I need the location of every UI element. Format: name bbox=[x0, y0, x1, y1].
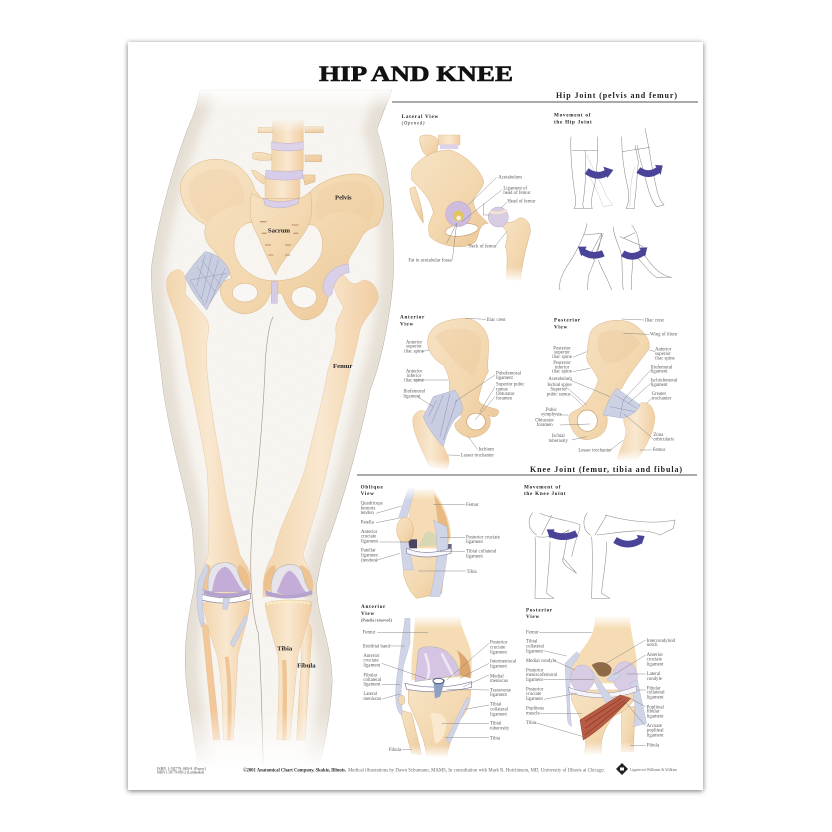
title: HIP AND KNEE bbox=[319, 61, 513, 86]
pelvic inlet bbox=[234, 223, 323, 281]
left fibula bbox=[202, 620, 220, 740]
labels: anterior knee: Tibial bbox=[490, 722, 501, 727]
labels: posterior view: Iliac crest bbox=[645, 318, 665, 323]
left femur bbox=[166, 270, 251, 593]
sacral foramina bbox=[260, 222, 298, 255]
main figure labels: Sacrum bbox=[268, 228, 291, 235]
labels: lateral view bbox=[408, 176, 536, 263]
labels: oblique view: (tendon) bbox=[361, 559, 378, 564]
illustration: pelvis lateral bbox=[410, 135, 488, 247]
labels: posterior view: inferior bbox=[555, 365, 570, 370]
ilium shading bbox=[188, 169, 374, 223]
labels: posterior view: Ischial spine bbox=[547, 383, 572, 388]
sacrum bbox=[250, 192, 312, 275]
labels: anterior view: iliac spine bbox=[404, 349, 424, 354]
labels: anterior knee: ligament bbox=[490, 665, 508, 670]
labels: posterior view: iliac spine bbox=[552, 355, 572, 360]
labels: anterior view: Iliac crest bbox=[487, 318, 506, 323]
illustration: anterior knee bbox=[396, 615, 472, 758]
labels: anterior knee: meniscus bbox=[363, 697, 381, 702]
labels: lateral view: Neck of femur bbox=[468, 244, 497, 249]
labels: posterior knee: collateral bbox=[647, 691, 665, 696]
heading: posterior view: View bbox=[554, 324, 568, 330]
right knee bbox=[264, 564, 313, 740]
labels: posterior knee: Femur bbox=[526, 631, 539, 636]
labels: anterior knee: Femur bbox=[363, 630, 376, 635]
leg sketch: hip abduction bbox=[571, 137, 613, 208]
labels: posterior knee: Popliteus bbox=[526, 706, 544, 711]
labels: posterior knee: ligament bbox=[647, 696, 664, 701]
labels: posterior knee: ligament bbox=[526, 678, 544, 683]
left tibia bbox=[203, 599, 250, 740]
labels: posterior view: Iliofemoral bbox=[651, 365, 672, 370]
labels: oblique view: ligament bbox=[466, 540, 484, 545]
labels: anterior view: Iliofemoral bbox=[403, 390, 425, 395]
labels: posterior knee: Tibia bbox=[526, 721, 537, 726]
heading: movement of the knee joint: Movement of bbox=[524, 484, 561, 490]
labels: oblique view: tendon bbox=[361, 511, 374, 516]
labels: posterior knee: ligament bbox=[647, 715, 664, 720]
labels: oblique view: Patella bbox=[361, 521, 375, 526]
panel: hip lateral view and movement bbox=[402, 112, 672, 290]
labels: anterior knee: Iliotibial band bbox=[363, 645, 390, 650]
labels: posterior view: symphysis bbox=[541, 413, 562, 418]
labels: anterior view: iliac spine bbox=[404, 379, 424, 384]
heading: hip joint section: Hip Joint (pelvis and femur) bbox=[556, 91, 677, 100]
labels: anterior knee: ligament bbox=[363, 663, 381, 668]
left knee ligaments bbox=[197, 563, 247, 647]
labels: posterior knee: Arcuate bbox=[647, 724, 662, 729]
heading: anterior knee view: View bbox=[361, 611, 375, 617]
soft shading at skin edges bbox=[152, 92, 394, 759]
labels: posterior view bbox=[535, 318, 678, 454]
labels: anterior view: Ischium bbox=[478, 448, 494, 453]
heading: posterior knee view: View bbox=[526, 614, 540, 620]
labels: posterior knee: fibular bbox=[647, 710, 660, 715]
labels: posterior view: superior bbox=[554, 351, 570, 356]
labels: posterior view: iliac spine bbox=[552, 370, 572, 375]
heading: anterior view: View bbox=[400, 321, 414, 327]
labels: posterior knee: ligament bbox=[526, 649, 544, 654]
labels: posterior knee: Anterior bbox=[647, 653, 663, 658]
labels: oblique view: cruciate bbox=[361, 535, 376, 540]
labels: posterior view: iliac spine bbox=[655, 356, 675, 361]
labels: posterior knee: ligament bbox=[647, 662, 664, 667]
main figure labels: Tibia bbox=[277, 645, 293, 652]
labels: anterior view: ligament bbox=[403, 394, 421, 399]
left meniscus bbox=[201, 593, 251, 603]
labels: anterior knee: Tibial bbox=[490, 703, 501, 708]
labels: posterior view: tuberosity bbox=[549, 439, 569, 444]
labels: posterior view: superior bbox=[655, 352, 671, 357]
body silhouette bbox=[151, 90, 393, 767]
top fade bbox=[130, 87, 392, 110]
heading: oblique view: View bbox=[361, 491, 375, 497]
labels: anterior knee: Posterior bbox=[490, 641, 507, 646]
labels: anterior knee bbox=[363, 630, 517, 753]
labels: posterior knee: ligament bbox=[647, 733, 664, 738]
heading: movement of the hip joint: the Hip Joint bbox=[554, 119, 592, 125]
labels: posterior view: Acetabulum bbox=[548, 377, 572, 382]
labels: posterior knee: muscle bbox=[526, 711, 540, 716]
heading: lateral view: (Opened) bbox=[402, 122, 425, 127]
labels: posterior view: trochanter bbox=[652, 397, 672, 402]
heading: oblique view: Oblique bbox=[361, 484, 384, 490]
labels: oblique view: femoris bbox=[361, 506, 376, 511]
pelvis bbox=[180, 159, 384, 320]
main figure labels bbox=[268, 194, 352, 670]
left hip ligament bbox=[185, 252, 230, 310]
labels: posterior view: orbicularis bbox=[653, 438, 674, 443]
right fibula bbox=[297, 620, 312, 740]
main figure: full pelvis and legs skeleton bbox=[151, 90, 394, 764]
labels: oblique view: ligament bbox=[361, 540, 379, 545]
labels: anterior knee: cruciate bbox=[490, 645, 505, 650]
footer: copyright and credits: ©2001 Anatomical Chart Company, Skokie, Illinois. bbox=[243, 768, 346, 774]
labels: oblique view: Quadriceps bbox=[361, 502, 383, 507]
labels: anterior knee: tuberosity bbox=[490, 726, 510, 731]
labels: posterior knee: notch bbox=[647, 643, 658, 648]
illustration: oblique knee bbox=[397, 487, 453, 598]
labels: anterior knee: Tibia bbox=[490, 736, 501, 741]
illustration: anterior hip bbox=[413, 318, 499, 471]
heading: knee joint section: Knee Joint (femur, tibia and fibula) bbox=[530, 465, 682, 474]
labels: anterior view: superior bbox=[406, 345, 422, 350]
labels: posterior knee: Medial condyle bbox=[526, 659, 556, 664]
leg sketch: knee extension bbox=[584, 513, 675, 598]
labels: anterior knee: meniscus bbox=[490, 679, 508, 684]
labels: posterior view: foramen bbox=[537, 423, 553, 428]
labels: posterior knee: Intercondyloid bbox=[647, 639, 675, 644]
labels: posterior view: Obturator bbox=[535, 418, 554, 423]
labels: oblique view: Anterior bbox=[361, 530, 377, 535]
heading: lateral view: Lateral View bbox=[402, 114, 439, 120]
poster sheet bbox=[128, 42, 703, 790]
footer: ISBN block: ISBN 1-58779-080-8 (Paper) bbox=[157, 767, 207, 771]
labels: oblique view: Femur bbox=[466, 503, 479, 508]
bottom fade bbox=[150, 710, 350, 770]
labels: posterior view: Ischial bbox=[552, 434, 565, 439]
labels: anterior knee: collateral bbox=[490, 707, 509, 712]
labels: posterior knee: ligament bbox=[526, 697, 544, 702]
heading: anterior knee view: (Patella removed) bbox=[361, 618, 392, 623]
labels: posterior knee: cruciate bbox=[647, 657, 662, 662]
labels: posterior view: ligament bbox=[651, 383, 668, 388]
main figure labels: Fibula bbox=[297, 663, 316, 670]
labels: anterior knee: Medial bbox=[490, 674, 504, 679]
publisher logo: Lippincott Williams & Wilkins bbox=[630, 768, 678, 772]
labels: lateral view: Fat in acetabular fossa bbox=[408, 258, 452, 263]
labels: oblique view bbox=[361, 502, 500, 575]
labels: oblique view: ligament bbox=[361, 554, 379, 559]
heading: posterior knee view: Posterior bbox=[526, 607, 553, 613]
labels: anterior view: Lesser trochanter bbox=[461, 454, 494, 459]
heading: anterior view: Anterior bbox=[400, 314, 425, 320]
labels: posterior knee bbox=[526, 631, 676, 749]
publisher logo bbox=[616, 763, 678, 775]
labels: lateral view: Ligament of bbox=[503, 186, 527, 191]
labels: lateral view: Acetabulum bbox=[498, 176, 522, 181]
leg sketch: knee flexion bbox=[529, 513, 580, 598]
labels: posterior view: Greater bbox=[652, 392, 666, 397]
spine top fade bbox=[257, 118, 325, 132]
popliteus muscle bbox=[580, 695, 631, 740]
labels: anterior view bbox=[403, 318, 525, 459]
labels: anterior view: Anterior bbox=[406, 340, 422, 345]
labels: posterior view: Superior bbox=[550, 388, 567, 393]
labels: anterior view: Anterior bbox=[406, 370, 422, 375]
labels: anterior view: inferior bbox=[407, 374, 422, 379]
labels: posterior view: Pubic bbox=[546, 408, 557, 413]
labels: posterior view: Posterior bbox=[553, 346, 571, 351]
labels: posterior view: Anterior bbox=[655, 348, 671, 353]
illustration: posterior hip bbox=[569, 320, 655, 462]
labels: posterior view: Wing of ilium bbox=[650, 333, 677, 338]
labels: oblique view: Patellar bbox=[361, 549, 376, 554]
labels: lateral view: Head of femur bbox=[507, 199, 536, 204]
illustration: posterior knee bbox=[565, 615, 647, 756]
footer: ISBN block: ISBN 1-58779-083-2 (Laminated) bbox=[157, 770, 205, 774]
labels: anterior knee: Fibula bbox=[389, 748, 402, 753]
labels: anterior knee: Lateral bbox=[363, 692, 377, 697]
leg sketch: hip flexion bbox=[560, 223, 612, 290]
left condyle shading bbox=[200, 565, 250, 590]
labels: anterior knee: ligament bbox=[490, 712, 508, 717]
labels: posterior view: pubic ramus bbox=[547, 393, 571, 398]
panel: hip anterior and posterior views bbox=[400, 314, 678, 471]
labels: posterior knee: Fibula bbox=[647, 744, 660, 749]
footer: ISBN block bbox=[157, 767, 207, 774]
right femur bbox=[263, 274, 378, 597]
labels: lateral view: head of femur bbox=[503, 191, 531, 196]
obturator foramina bbox=[232, 283, 258, 302]
labels: anterior knee: Intermeniscal bbox=[490, 660, 516, 665]
illustration: femur lateral bbox=[488, 207, 530, 282]
leg sketch: hip adduction bbox=[622, 128, 664, 208]
labels: anterior knee: ligament bbox=[490, 693, 508, 698]
labels: posterior knee: condyle bbox=[647, 677, 662, 682]
labels: posterior knee: popliteal bbox=[647, 728, 664, 733]
labels: oblique view: ligament bbox=[466, 554, 484, 559]
labels: oblique view: Tibial collateral bbox=[466, 549, 497, 554]
labels: posterior view: Posterior bbox=[553, 361, 571, 366]
labels: posterior knee: Tibial bbox=[526, 640, 537, 645]
left knee bbox=[197, 563, 251, 740]
labels: anterior knee: Fibular bbox=[363, 674, 377, 679]
labels: anterior knee: Transverse bbox=[490, 688, 511, 693]
labels: oblique view: Posterior cruciate bbox=[466, 535, 500, 540]
labels: anterior view: Obturator bbox=[496, 392, 515, 397]
heading: movement of the hip joint: Movement of bbox=[554, 112, 591, 118]
labels: anterior knee: ligament bbox=[363, 682, 381, 687]
labels: anterior view: ramus bbox=[496, 387, 508, 392]
labels: posterior view: ligament bbox=[651, 370, 668, 375]
labels: anterior knee: cruciate bbox=[363, 658, 379, 663]
labels: anterior knee: collateral bbox=[363, 678, 382, 683]
labels: posterior knee: Posterior bbox=[526, 687, 543, 692]
heading: anterior knee view: Anterior bbox=[361, 604, 386, 610]
right tibia bbox=[265, 600, 312, 740]
footer: copyright and credits bbox=[243, 768, 605, 774]
panel: knee anterior and posterior views bbox=[361, 604, 676, 758]
labels: posterior knee: meniscofemoral bbox=[526, 673, 558, 678]
inner leg line bbox=[251, 317, 273, 763]
labels: anterior view: Pubofemoral bbox=[496, 372, 521, 377]
labels: posterior view: Femur bbox=[653, 448, 666, 453]
labels: posterior knee: Lateral bbox=[647, 672, 660, 677]
right condyle shading bbox=[264, 565, 313, 590]
pubic symphysis bbox=[271, 282, 277, 303]
spine bbox=[252, 120, 323, 202]
footer: copyright and credits: Medical illustrations by Dawn Schumann, MAMS, In consultation with Mark R. Hutchinson, MD, University of Illinois at Chicago. bbox=[348, 768, 605, 774]
leg sketch: hip extension bbox=[613, 225, 672, 290]
labels: anterior knee: Anterior bbox=[363, 654, 380, 659]
labels: posterior knee: cruciate bbox=[526, 692, 541, 697]
labels: posterior view: Zona bbox=[653, 433, 663, 438]
L5 disc bbox=[263, 198, 298, 208]
labels: oblique view: Tibia bbox=[467, 570, 478, 575]
labels: posterior knee: collateral bbox=[526, 644, 545, 649]
labels: posterior view: Lesser trochanter bbox=[578, 449, 612, 454]
heading: posterior view: Posterior bbox=[554, 318, 581, 324]
labels: anterior view: ligament bbox=[496, 376, 514, 381]
labels: anterior knee: ligament bbox=[490, 650, 508, 655]
labels: anterior view: foramen bbox=[496, 396, 513, 401]
panel: knee oblique view and movement bbox=[361, 484, 675, 598]
main figure labels: Pelvis bbox=[335, 194, 352, 201]
labels: posterior knee: Posterior bbox=[526, 668, 543, 673]
labels: posterior knee: Fibular bbox=[647, 686, 661, 691]
heading: movement of the knee joint: the Knee Joint bbox=[524, 491, 566, 497]
labels: anterior view: Superior pubic bbox=[496, 383, 525, 388]
main figure labels: Femur bbox=[333, 363, 352, 370]
labels: posterior view: Ischiofemoral bbox=[651, 379, 677, 384]
labels: posterior knee: Popliteal bbox=[647, 705, 664, 710]
right hip capsule bbox=[323, 264, 349, 297]
